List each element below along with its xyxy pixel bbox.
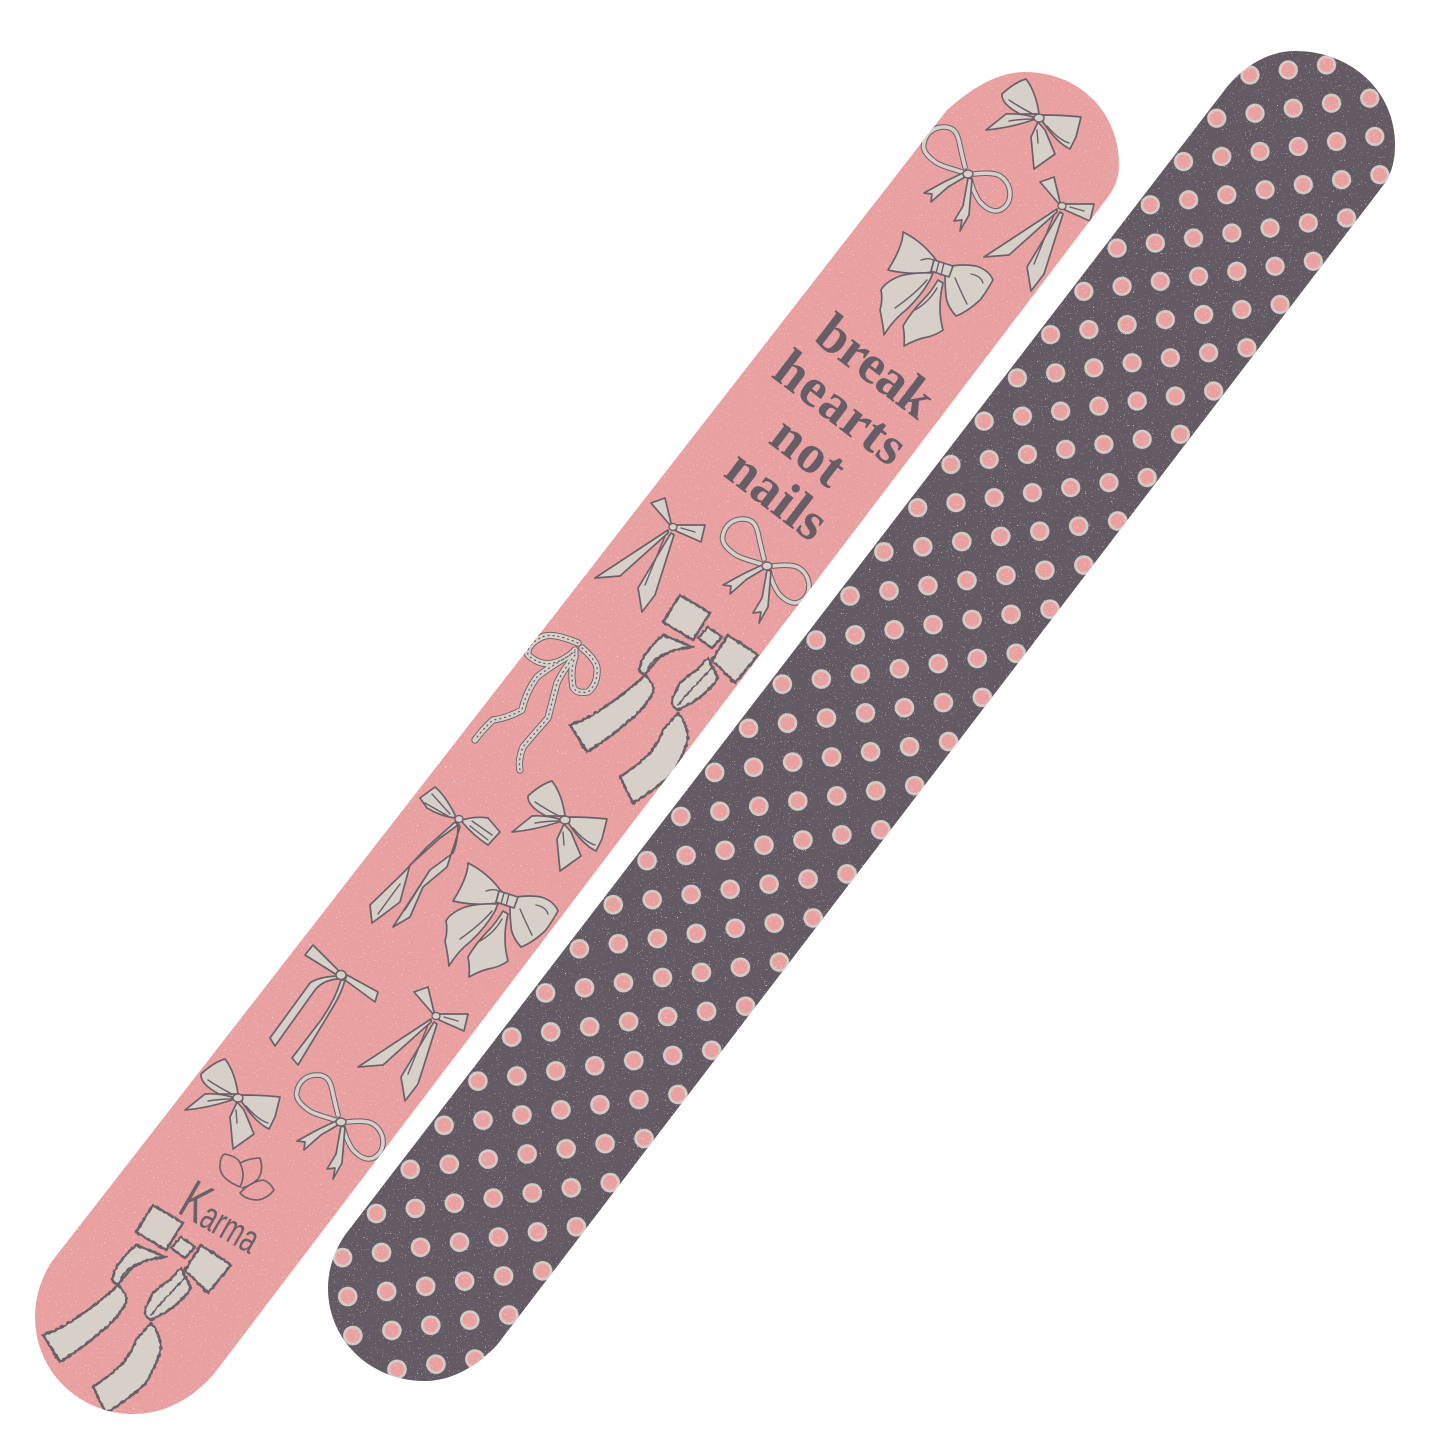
heading: break hearts not nails: break [805,301,948,430]
icon: ruffled bow, middle [570,595,758,803]
heading: break hearts not nails: nails [715,436,841,552]
icon: solid bow, lower [185,1059,280,1149]
icon: dotted ribbon bow [475,635,597,770]
icon: ruffled bow, bottom [43,1205,231,1413]
panel: pink nail file [0,40,1140,1440]
heading: break hearts not nails: hearts [763,337,920,477]
icon: straight thin bow [270,945,378,1065]
icon: loop bow, top [923,127,1010,231]
icon: long tail bow, lower [358,987,468,1101]
icon: long tail bow, top [984,177,1094,291]
icon: thin bow with ribbons [370,787,500,927]
heading: break hearts not nails [723,310,932,540]
icon: big bow, lower [445,863,558,977]
icon: loop bow, lower [296,1075,383,1179]
icon: solid bow, middle [512,781,607,871]
icon: loop bow, middle [722,519,809,623]
panel: dark polka dot nail file [300,30,1420,1400]
logo: Karma [178,1153,275,1254]
icon: long tail bow, middle [595,498,705,612]
polka dots [300,30,1420,1400]
icon: big bow, top [880,232,993,346]
logo: Karma: Karma [170,1169,274,1266]
heading: break hearts not nails: not [760,403,859,499]
icon: solid bow, top [986,79,1081,169]
